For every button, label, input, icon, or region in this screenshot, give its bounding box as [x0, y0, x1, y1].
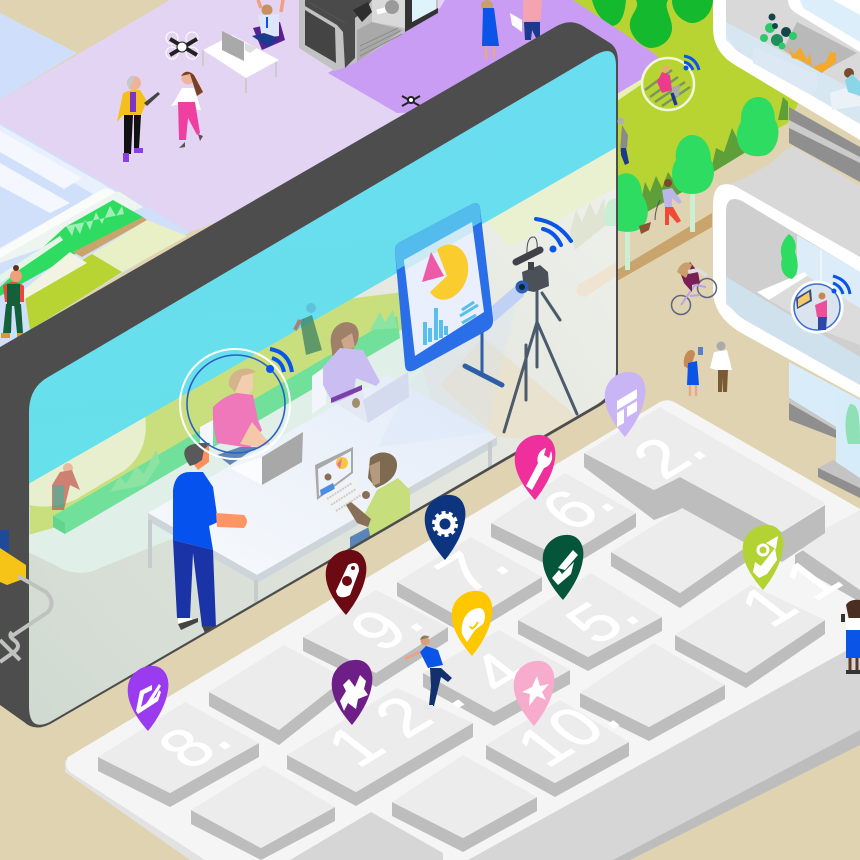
projection light on table	[440, 338, 504, 428]
pin: pen	[128, 666, 168, 731]
chair pink	[200, 420, 213, 450]
white ring	[180, 349, 290, 459]
faded gardener left	[52, 463, 80, 510]
pale strip under violet floor	[617, 74, 650, 101]
panel: violet floor	[328, 0, 660, 113]
pin: head idea	[452, 591, 492, 656]
figure: man with tablet	[117, 76, 160, 162]
figure: man in blue foreground	[173, 443, 247, 633]
upper window	[788, 0, 860, 52]
panel: upper building	[713, 0, 860, 182]
tree	[606, 173, 648, 270]
presentation board	[395, 203, 493, 371]
platform	[28, 325, 440, 573]
figure: man in pink	[213, 368, 270, 465]
tree pale	[30, 415, 146, 507]
number 10: 10.	[500, 686, 635, 778]
laptop grey	[230, 432, 303, 485]
panel: lower building	[713, 146, 860, 498]
icon: camera wifi	[536, 219, 571, 252]
keyboard base top	[66, 400, 860, 860]
orange chairs	[787, 45, 836, 73]
key blank under 2	[611, 508, 749, 608]
figure: woman on the right with phone	[841, 600, 860, 674]
connector and cable	[0, 530, 52, 662]
number 2: 2.	[617, 416, 721, 490]
number 5: 5.	[550, 581, 654, 655]
tree	[737, 97, 778, 156]
figure: woman in lilac	[323, 322, 380, 403]
key blank bottom	[191, 765, 335, 860]
hedge	[53, 316, 400, 534]
panel: beige path strip	[617, 213, 712, 281]
bar chart	[425, 308, 446, 345]
glass railing	[726, 22, 860, 124]
glass railing	[726, 277, 860, 385]
figure: seated man arms raised	[252, 0, 285, 50]
icon: bench with person and ring	[642, 56, 699, 110]
panel: dark screen frame	[0, 22, 618, 728]
figure: cyclist	[672, 262, 716, 314]
shelf	[757, 272, 807, 300]
key blank left	[209, 645, 345, 745]
figure: man in green	[346, 452, 410, 548]
grass tufts	[110, 310, 398, 492]
sofa	[753, 47, 818, 93]
number 4: 4.	[454, 631, 558, 705]
number 8: 8.	[142, 706, 246, 780]
figures: two people talking	[684, 342, 732, 396]
pin: wrench	[515, 435, 555, 500]
plant	[781, 234, 798, 279]
key 4	[423, 630, 570, 726]
panel: lime park	[570, 0, 800, 216]
figure: walker behind glass	[618, 118, 629, 165]
tripod	[504, 290, 577, 432]
pin: people	[332, 660, 372, 725]
pale grass	[485, 146, 617, 247]
key 12	[287, 688, 473, 806]
icon: drone	[166, 32, 198, 59]
key 11	[675, 585, 825, 688]
key 10	[486, 700, 629, 797]
panel: garden block left	[0, 123, 190, 350]
pin: layout	[605, 372, 645, 437]
key 2	[584, 407, 825, 562]
figure: gardener top left	[1, 265, 26, 338]
keyboard base side	[65, 760, 210, 860]
camera	[516, 237, 549, 294]
figure: woman in blue dress	[481, 0, 499, 60]
panel: pale blue building roof	[0, 13, 77, 100]
laptop with video call	[315, 447, 361, 512]
key 5	[518, 573, 662, 671]
hedge tufts	[640, 97, 788, 216]
woman on sofa	[844, 68, 860, 96]
table	[148, 375, 497, 606]
ground floor glass	[789, 362, 836, 427]
pin: star	[514, 661, 554, 726]
figure: woman in pink trousers	[171, 72, 203, 148]
beige floor seen through glass	[440, 337, 577, 440]
pin: gear	[425, 495, 465, 560]
pin: location hand	[743, 525, 783, 590]
key blank right of 10	[580, 643, 725, 741]
panel: lilac floor	[0, 0, 500, 232]
tree	[672, 135, 714, 232]
pie chart	[430, 245, 468, 300]
floor	[769, 276, 860, 345]
key blank top right	[795, 510, 860, 602]
figure: person with laptop	[510, 0, 542, 40]
key blank bottom centre	[392, 755, 537, 852]
number 6: 6.	[525, 468, 629, 542]
plant	[760, 14, 797, 50]
number 12: 12.	[311, 654, 497, 778]
key 8	[98, 702, 259, 807]
glass outline	[28, 50, 617, 726]
pin: layers	[543, 535, 583, 600]
desk with computer	[203, 31, 279, 93]
faded gardener behind	[295, 303, 322, 355]
chair lilac	[312, 366, 326, 414]
icon: ring with wifi on pink man	[187, 349, 292, 453]
key 9	[303, 590, 448, 687]
space bar	[468, 643, 860, 860]
machine at top	[299, 0, 438, 71]
small drone on ledge	[402, 96, 420, 106]
tufts and tree right	[570, 198, 606, 250]
pin: rocket gear	[326, 550, 366, 615]
laptop lilac	[335, 372, 409, 423]
number 9: 9.	[334, 588, 438, 662]
key 6	[491, 473, 636, 572]
panel: top-left beige	[0, 0, 170, 53]
figure: woman walking dog	[639, 179, 682, 234]
number 7: 7.	[420, 531, 524, 605]
pale path strip	[577, 262, 617, 297]
presentation board stand	[465, 330, 502, 385]
top trees	[592, 0, 713, 48]
icon: video ring	[792, 276, 850, 332]
key 7	[397, 537, 542, 636]
key modifier bottom	[290, 812, 443, 860]
floor patch	[783, 22, 857, 73]
green lawn seen through glass	[30, 290, 420, 534]
window	[797, 235, 860, 340]
light cone	[492, 282, 524, 322]
panel: glass screen contents	[29, 51, 616, 725]
panel: keyboard	[65, 400, 860, 860]
floor underside	[789, 107, 860, 182]
cyan wall	[20, 40, 617, 490]
figure: running man	[405, 636, 452, 709]
